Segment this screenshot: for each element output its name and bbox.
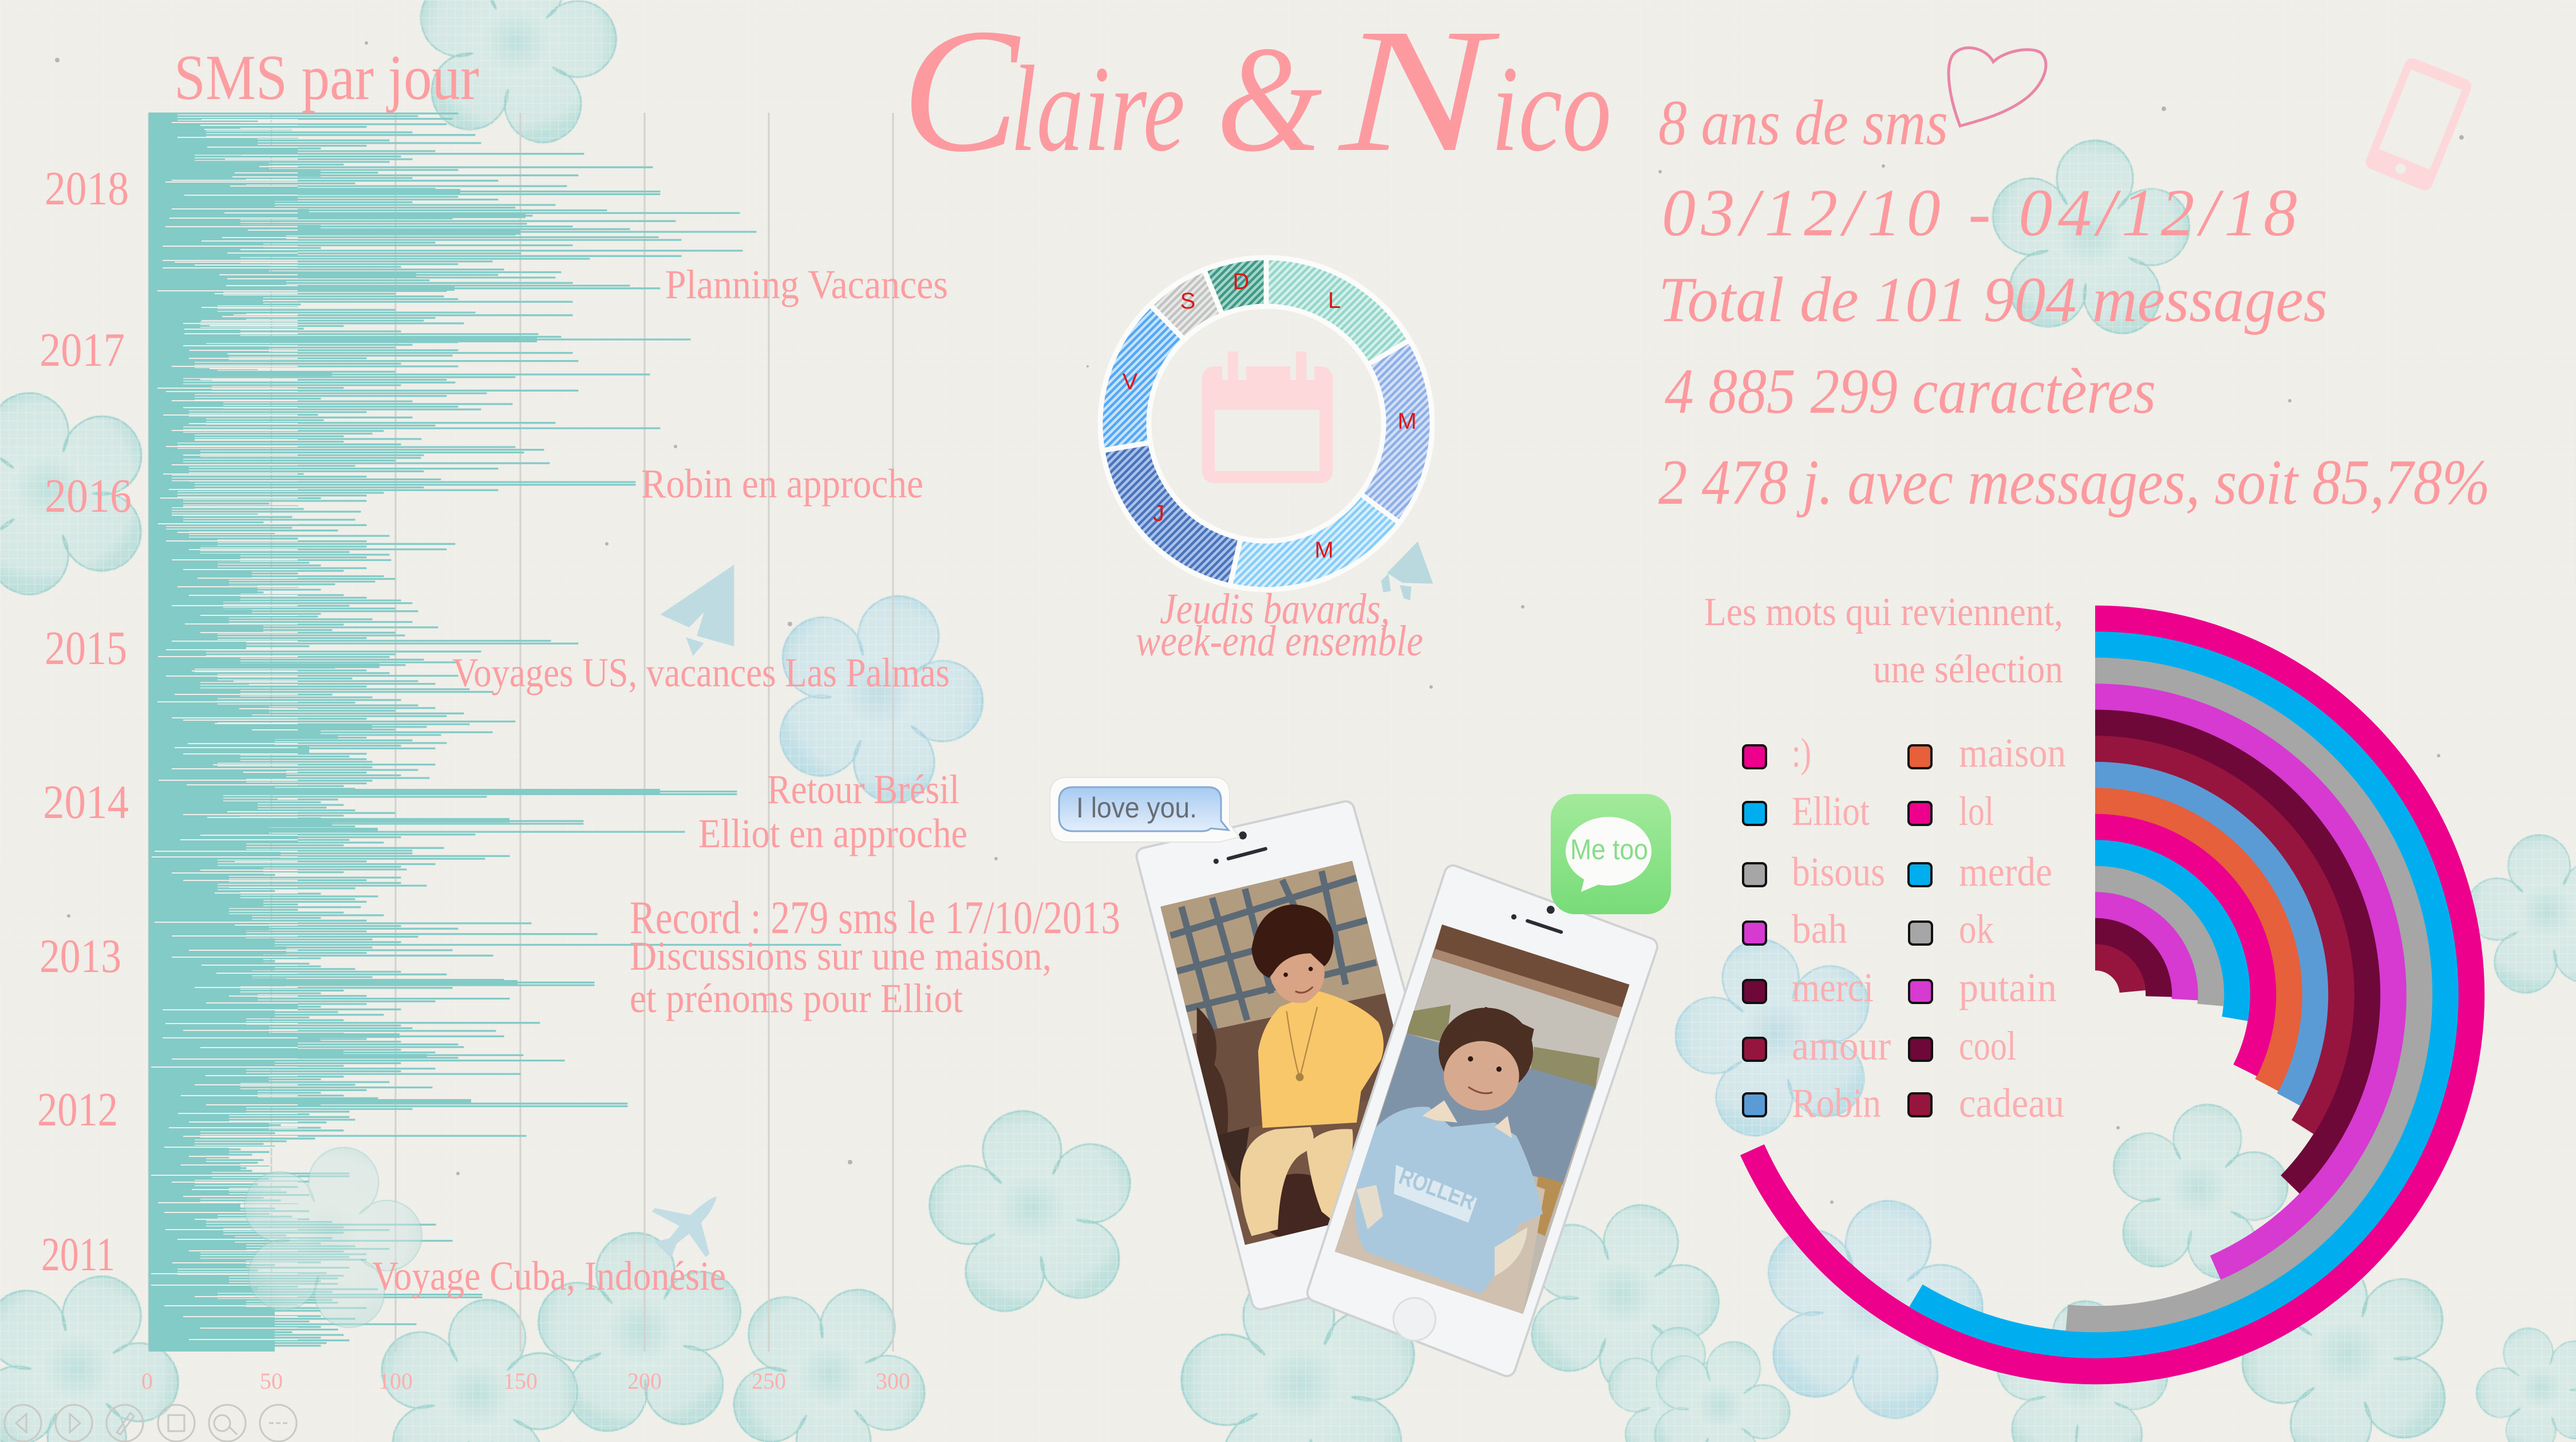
segment: samedi: [1151, 270, 1222, 339]
legend: words: Robin: [1792, 1080, 1881, 1126]
axis labels: 150: [503, 1368, 538, 1394]
weekday labels: L: [1328, 288, 1341, 313]
icon: airplane: [652, 1196, 717, 1258]
axis labels: 0: [141, 1368, 153, 1394]
phones with childhood photos: [1145, 810, 1649, 1368]
main title: laire: [1010, 40, 1185, 177]
dense bar mass: [149, 113, 343, 1352]
event annotations: Retour Brésil: [767, 767, 959, 812]
main title: ico: [1491, 40, 1611, 177]
donut chart: messages per weekday: [1100, 258, 1432, 590]
legend: words: [1743, 730, 2066, 1126]
segment: jeudi: [1103, 443, 1240, 586]
key statistics: Total de 101 904 messages: [1658, 264, 2328, 335]
icon: heart outline: [1949, 48, 2046, 126]
icon: green message app, Me too: [1551, 794, 1671, 914]
icon: calendar: [1202, 351, 1333, 483]
icon: green message app, Me too: Me too: [1570, 833, 1648, 866]
axis labels: 250: [752, 1368, 786, 1394]
year labels: 2014: [43, 776, 129, 829]
weekday labels: [1123, 269, 1417, 563]
weekday labels: S: [1180, 289, 1195, 314]
bar chart: SMS par jour: [141, 113, 910, 1394]
icon: phone: [2364, 56, 2474, 193]
key statistics: 2 478 j. avec messages, soit 85,78%: [1658, 447, 2490, 518]
words chart heading: une sélection: [1873, 647, 2063, 692]
legend: words: bisous: [1792, 849, 1885, 895]
photo: child in blue shirt: ROLLER: [1396, 1162, 1479, 1215]
event annotations: Voyages US, vacances Las Palmas: [452, 650, 950, 696]
flower over the chart: [220, 1125, 440, 1341]
legend: words: cadeau: [1959, 1080, 2064, 1126]
weekday labels: D: [1233, 269, 1249, 294]
segment: lundi: [1266, 258, 1410, 365]
words chart heading: [1704, 590, 2063, 692]
weekday labels: V: [1123, 369, 1138, 394]
segment: mercredi: [1230, 493, 1399, 590]
legend: words: maison: [1959, 730, 2066, 776]
donut caption: week-end ensemble: [1136, 617, 1423, 665]
legend: words: merci: [1792, 965, 1874, 1010]
event annotations: et prénoms pour Elliot: [630, 975, 963, 1021]
legend: words: lol: [1959, 788, 1994, 834]
short bars cutting into the mass: [151, 120, 298, 1340]
thick high-volume bars: [149, 191, 660, 1101]
daily message bars: [149, 113, 841, 1349]
year labels: 2013: [39, 930, 121, 983]
legend: words: bah: [1792, 906, 1847, 952]
year labels: 2017: [39, 323, 125, 377]
weekday labels: J: [1153, 501, 1164, 526]
icon: paper plane: [660, 565, 734, 656]
event annotations: Elliot en approche: [698, 811, 967, 856]
key statistics: [1658, 88, 2490, 518]
legend: words: merde: [1959, 849, 2052, 895]
axis labels: 100: [378, 1368, 413, 1394]
legend: words: :): [1792, 730, 1811, 776]
event annotations: [372, 262, 1120, 1299]
photo: child in yellow sweater: [1160, 861, 1393, 1245]
photo: child in blue shirt: [1328, 918, 1635, 1318]
chart title: SMS par jour: [174, 42, 479, 113]
key statistics: 4 885 299 caractères: [1665, 356, 2156, 427]
segment: mardi: [1360, 340, 1432, 523]
words chart heading: Les mots qui reviennent,: [1704, 590, 2063, 634]
right phone: [1316, 874, 1649, 1368]
legend: words: cool: [1959, 1023, 2016, 1069]
legend: words: putain: [1959, 965, 2057, 1010]
weekday labels: M: [1314, 538, 1334, 563]
axis labels: [141, 1368, 910, 1394]
event annotations: Planning Vacances: [665, 262, 948, 307]
event annotations: Voyage Cuba, Indonésie: [372, 1253, 726, 1299]
legend: words: Elliot: [1792, 788, 1870, 834]
year labels: 2011: [41, 1228, 115, 1281]
key statistics: 03/12/10 - 04/12/18: [1662, 175, 2297, 250]
year labels: 2015: [45, 622, 127, 675]
legend: words: amour: [1792, 1023, 1891, 1069]
year labels: 2012: [37, 1083, 118, 1136]
axis labels: 50: [260, 1368, 283, 1394]
donut caption: Jeudis bavards,: [1160, 585, 1390, 633]
icon: megaphone: [1381, 542, 1433, 600]
weekday labels: M: [1397, 409, 1417, 434]
main title: &: [1216, 15, 1323, 183]
axis labels: 200: [627, 1368, 662, 1394]
presentation toolbar icons: [5, 1405, 297, 1441]
radial bar chart: words: [1752, 619, 2471, 1371]
event annotations: Robin en approche: [641, 461, 923, 507]
year labels: [37, 162, 132, 1281]
segment: vendredi: [1100, 305, 1184, 451]
event annotations: Record : 279 sms le 17/10/2013: [630, 891, 1120, 943]
event annotations: Discussions sur une maison,: [630, 933, 1052, 979]
key statistics: 8 ans de sms: [1658, 88, 1948, 159]
segment: dimanche: [1204, 258, 1266, 315]
year labels: 2018: [45, 162, 129, 215]
speech bubble: I love you: I love you.: [1076, 792, 1197, 824]
axis labels: 300: [876, 1368, 910, 1394]
year labels: 2016: [45, 469, 132, 523]
left phone: [1136, 800, 1405, 1310]
legend: words: ok: [1959, 906, 1994, 952]
donut caption: [1136, 585, 1423, 665]
main title: [902, 0, 1611, 189]
speech bubble: I love you: [1050, 777, 1239, 842]
